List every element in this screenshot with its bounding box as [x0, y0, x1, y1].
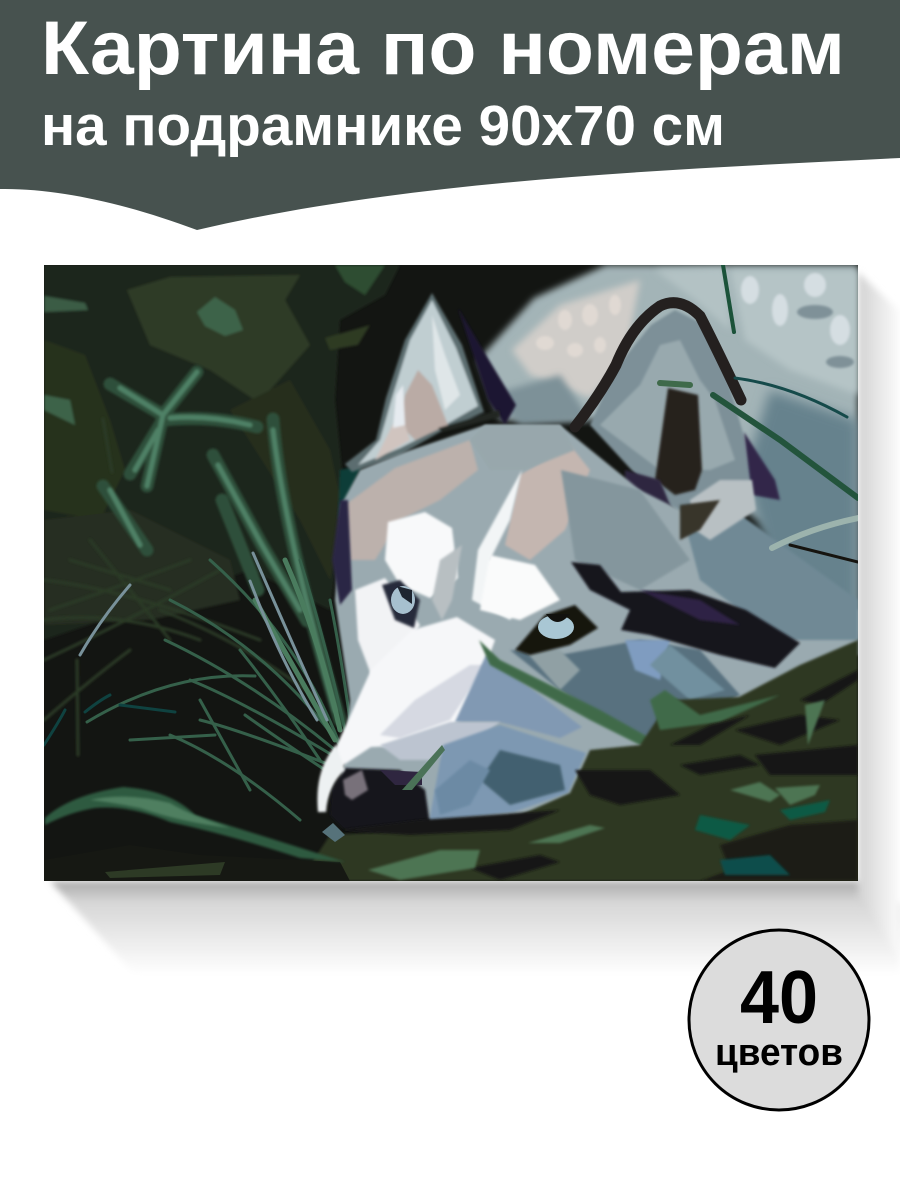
badge number: 40: [740, 955, 818, 1039]
dark ground patches: [340, 670, 858, 881]
left ear: [345, 293, 500, 472]
header banner: [0, 0, 900, 230]
light blades over fur: [660, 265, 858, 562]
canvas shadow: [50, 272, 900, 975]
foreground ground and grass: [44, 640, 858, 881]
nose: [330, 768, 430, 836]
background foliage: [44, 265, 400, 640]
cross-shaped leaves: [44, 372, 340, 755]
cheek: [510, 640, 740, 742]
snout: [334, 616, 496, 767]
subtitle: на подрамнике 90x70 см: [41, 94, 725, 158]
wolf back: [458, 265, 858, 640]
head: [317, 425, 858, 836]
fur mottling: [536, 295, 621, 357]
badge: 40 colours: [689, 930, 869, 1110]
purple shadow: [458, 308, 516, 425]
grass fan: [44, 553, 350, 820]
painting: husky in grass: [44, 265, 858, 881]
eyes: [382, 580, 420, 628]
title: Картина по номерам: [41, 6, 845, 91]
lower muzzle: [429, 725, 586, 822]
dark mask: [571, 562, 800, 668]
white face blaze: [385, 512, 458, 598]
badge label: цветов: [715, 1032, 843, 1074]
right ear: [575, 303, 780, 530]
